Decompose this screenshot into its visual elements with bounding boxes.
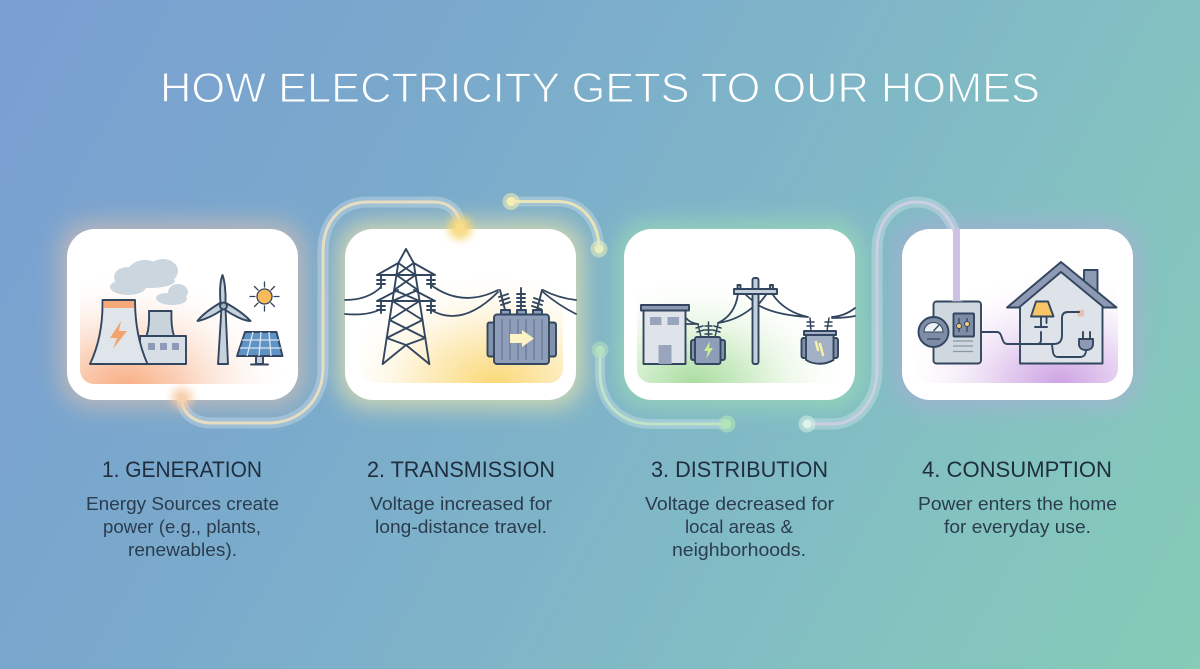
icon: power plant bbox=[90, 300, 186, 364]
icon: electric meter bbox=[918, 302, 981, 364]
step 3 text: 3. DISTRIBUTION bbox=[651, 457, 828, 482]
icon: step-down transformer bbox=[691, 322, 725, 364]
connector: distribution bottom bbox=[592, 342, 736, 432]
icon: sun bbox=[250, 282, 279, 311]
step 3 text: local areas & bbox=[685, 516, 794, 537]
step 4 text: Power enters the home bbox=[918, 493, 1117, 514]
step 3 text: Voltage decreased for bbox=[645, 493, 834, 514]
panel: generation bbox=[67, 229, 298, 400]
icon: solar panel bbox=[237, 332, 282, 364]
panel: consumption bbox=[902, 229, 1133, 400]
step 2 text: 2. TRANSMISSION bbox=[367, 457, 555, 482]
icon: plug bbox=[1079, 332, 1093, 350]
icon: house bbox=[1007, 262, 1116, 364]
step 4 text bbox=[918, 457, 1117, 537]
panel: distribution bbox=[624, 229, 855, 400]
icon: step-up transformer bbox=[488, 288, 556, 364]
step 1 text bbox=[86, 457, 279, 560]
icon: pylon bbox=[377, 249, 435, 364]
step 1 text: power (e.g., plants, bbox=[103, 516, 261, 537]
icon: wind turbine bbox=[198, 275, 250, 364]
card glows bbox=[60, 222, 1140, 407]
panel: transmission bbox=[345, 229, 576, 400]
icon: smoke clouds bbox=[110, 259, 188, 305]
connector: distribution to consumption bbox=[798, 202, 960, 432]
step 2 text: long-distance travel. bbox=[375, 516, 547, 537]
icon: utility pole bbox=[734, 278, 777, 364]
icon: wires bbox=[686, 294, 855, 324]
step 4 text: 4. CONSUMPTION bbox=[922, 457, 1112, 482]
step 1 text: renewables). bbox=[128, 539, 237, 560]
step 3 text bbox=[645, 457, 834, 560]
step 1 text: Energy Sources create bbox=[86, 493, 279, 514]
step 4 text: for everyday use. bbox=[944, 516, 1091, 537]
icon: lamp bbox=[1031, 302, 1054, 327]
icon: pole transformer bbox=[802, 318, 838, 364]
icon: wiring bbox=[981, 312, 1086, 357]
step 3 text: neighborhoods. bbox=[672, 539, 806, 560]
connector: generation to transmission bbox=[171, 202, 472, 423]
icon: substation building bbox=[641, 305, 689, 364]
icon: wires bbox=[345, 285, 576, 316]
step 1 text: 1. GENERATION bbox=[102, 457, 262, 482]
title: HOW ELECTRICITY GETS TO OUR HOMES bbox=[160, 64, 1040, 111]
connector: transmission to distribution top bbox=[502, 193, 608, 258]
step 2 text: Voltage increased for bbox=[370, 493, 552, 514]
step 2 text bbox=[367, 457, 555, 537]
